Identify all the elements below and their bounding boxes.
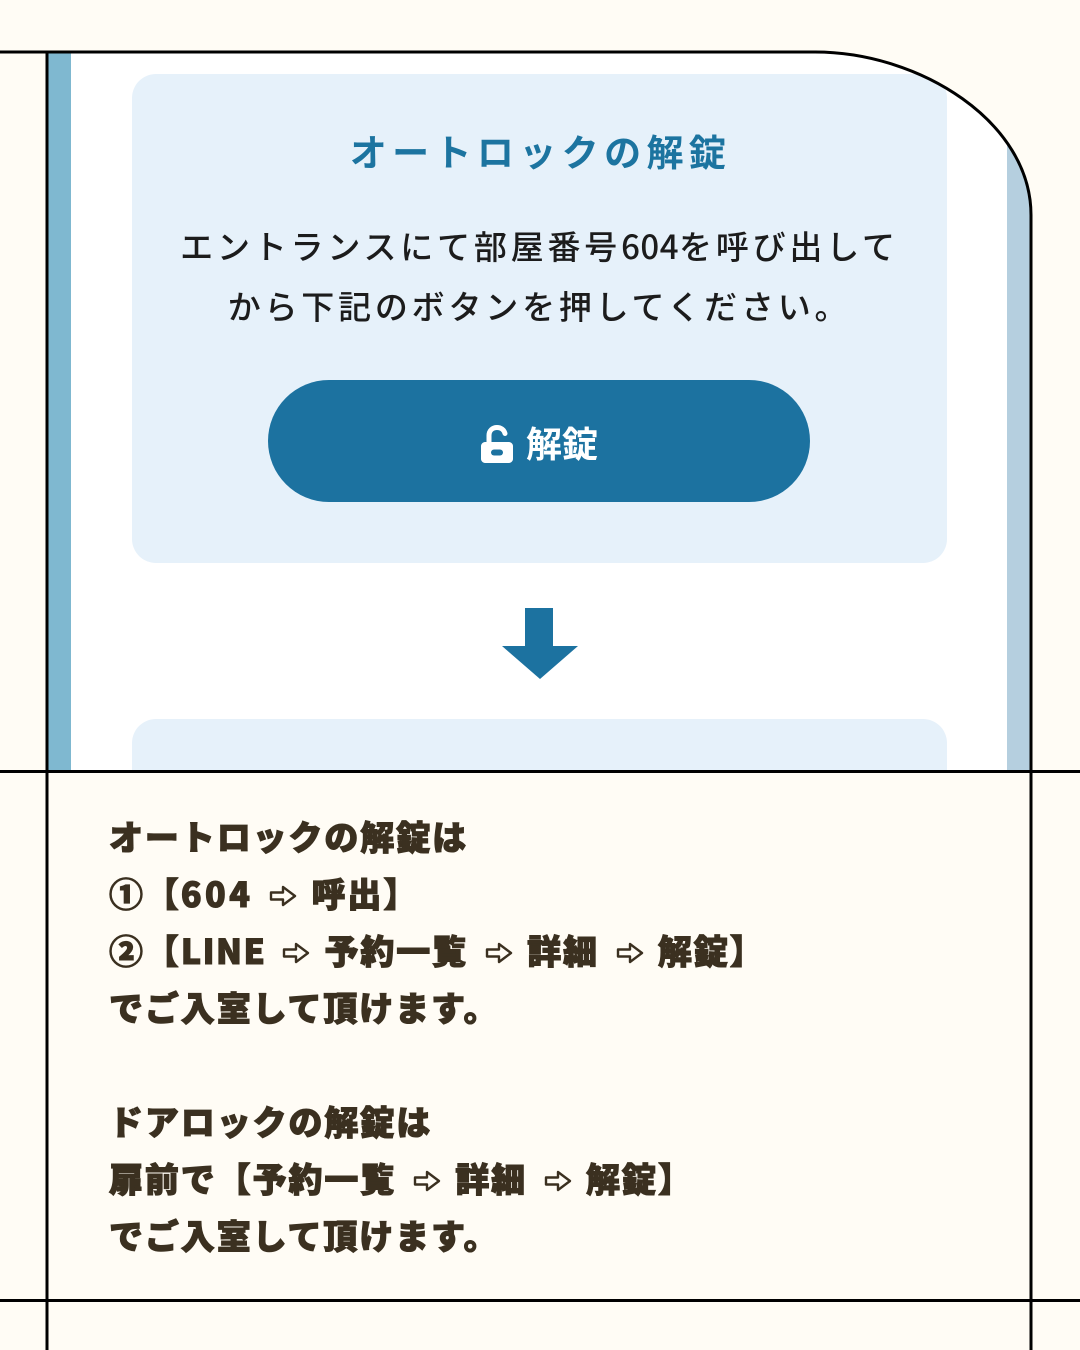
auto-lock heading: オートロックの解錠は [109, 811, 468, 860]
button label: 解錠 [526, 416, 598, 468]
unlock button [268, 380, 810, 502]
arrow: down [502, 608, 578, 679]
door-lock steps: 扉前で【予約一覧 詳細 解錠】 [109, 1153, 694, 1202]
card instruction text line 1: エントランスにて部屋番号604を呼び出して [180, 221, 899, 269]
card: auto-lock unlock [132, 74, 947, 563]
card title: オートロックの解錠 [350, 123, 731, 177]
auto-lock closing: でご入室して頂けます。 [109, 982, 499, 1031]
phone screen panel [48, 54, 1030, 770]
door-lock closing: でご入室して頂けます。 [109, 1210, 499, 1259]
door-lock heading: ドアロックの解錠は [109, 1096, 432, 1145]
card instruction text line 2: から下記のボタンを押してください。 [228, 281, 851, 329]
step 2: ②【LINE 予約一覧 詳細 解錠】 [109, 925, 766, 974]
explanation text [108, 811, 766, 1259]
icon: open padlock [481, 425, 513, 463]
step 1: ①【604 呼出】 [109, 868, 419, 917]
card: next step (cropped) [132, 719, 947, 771]
